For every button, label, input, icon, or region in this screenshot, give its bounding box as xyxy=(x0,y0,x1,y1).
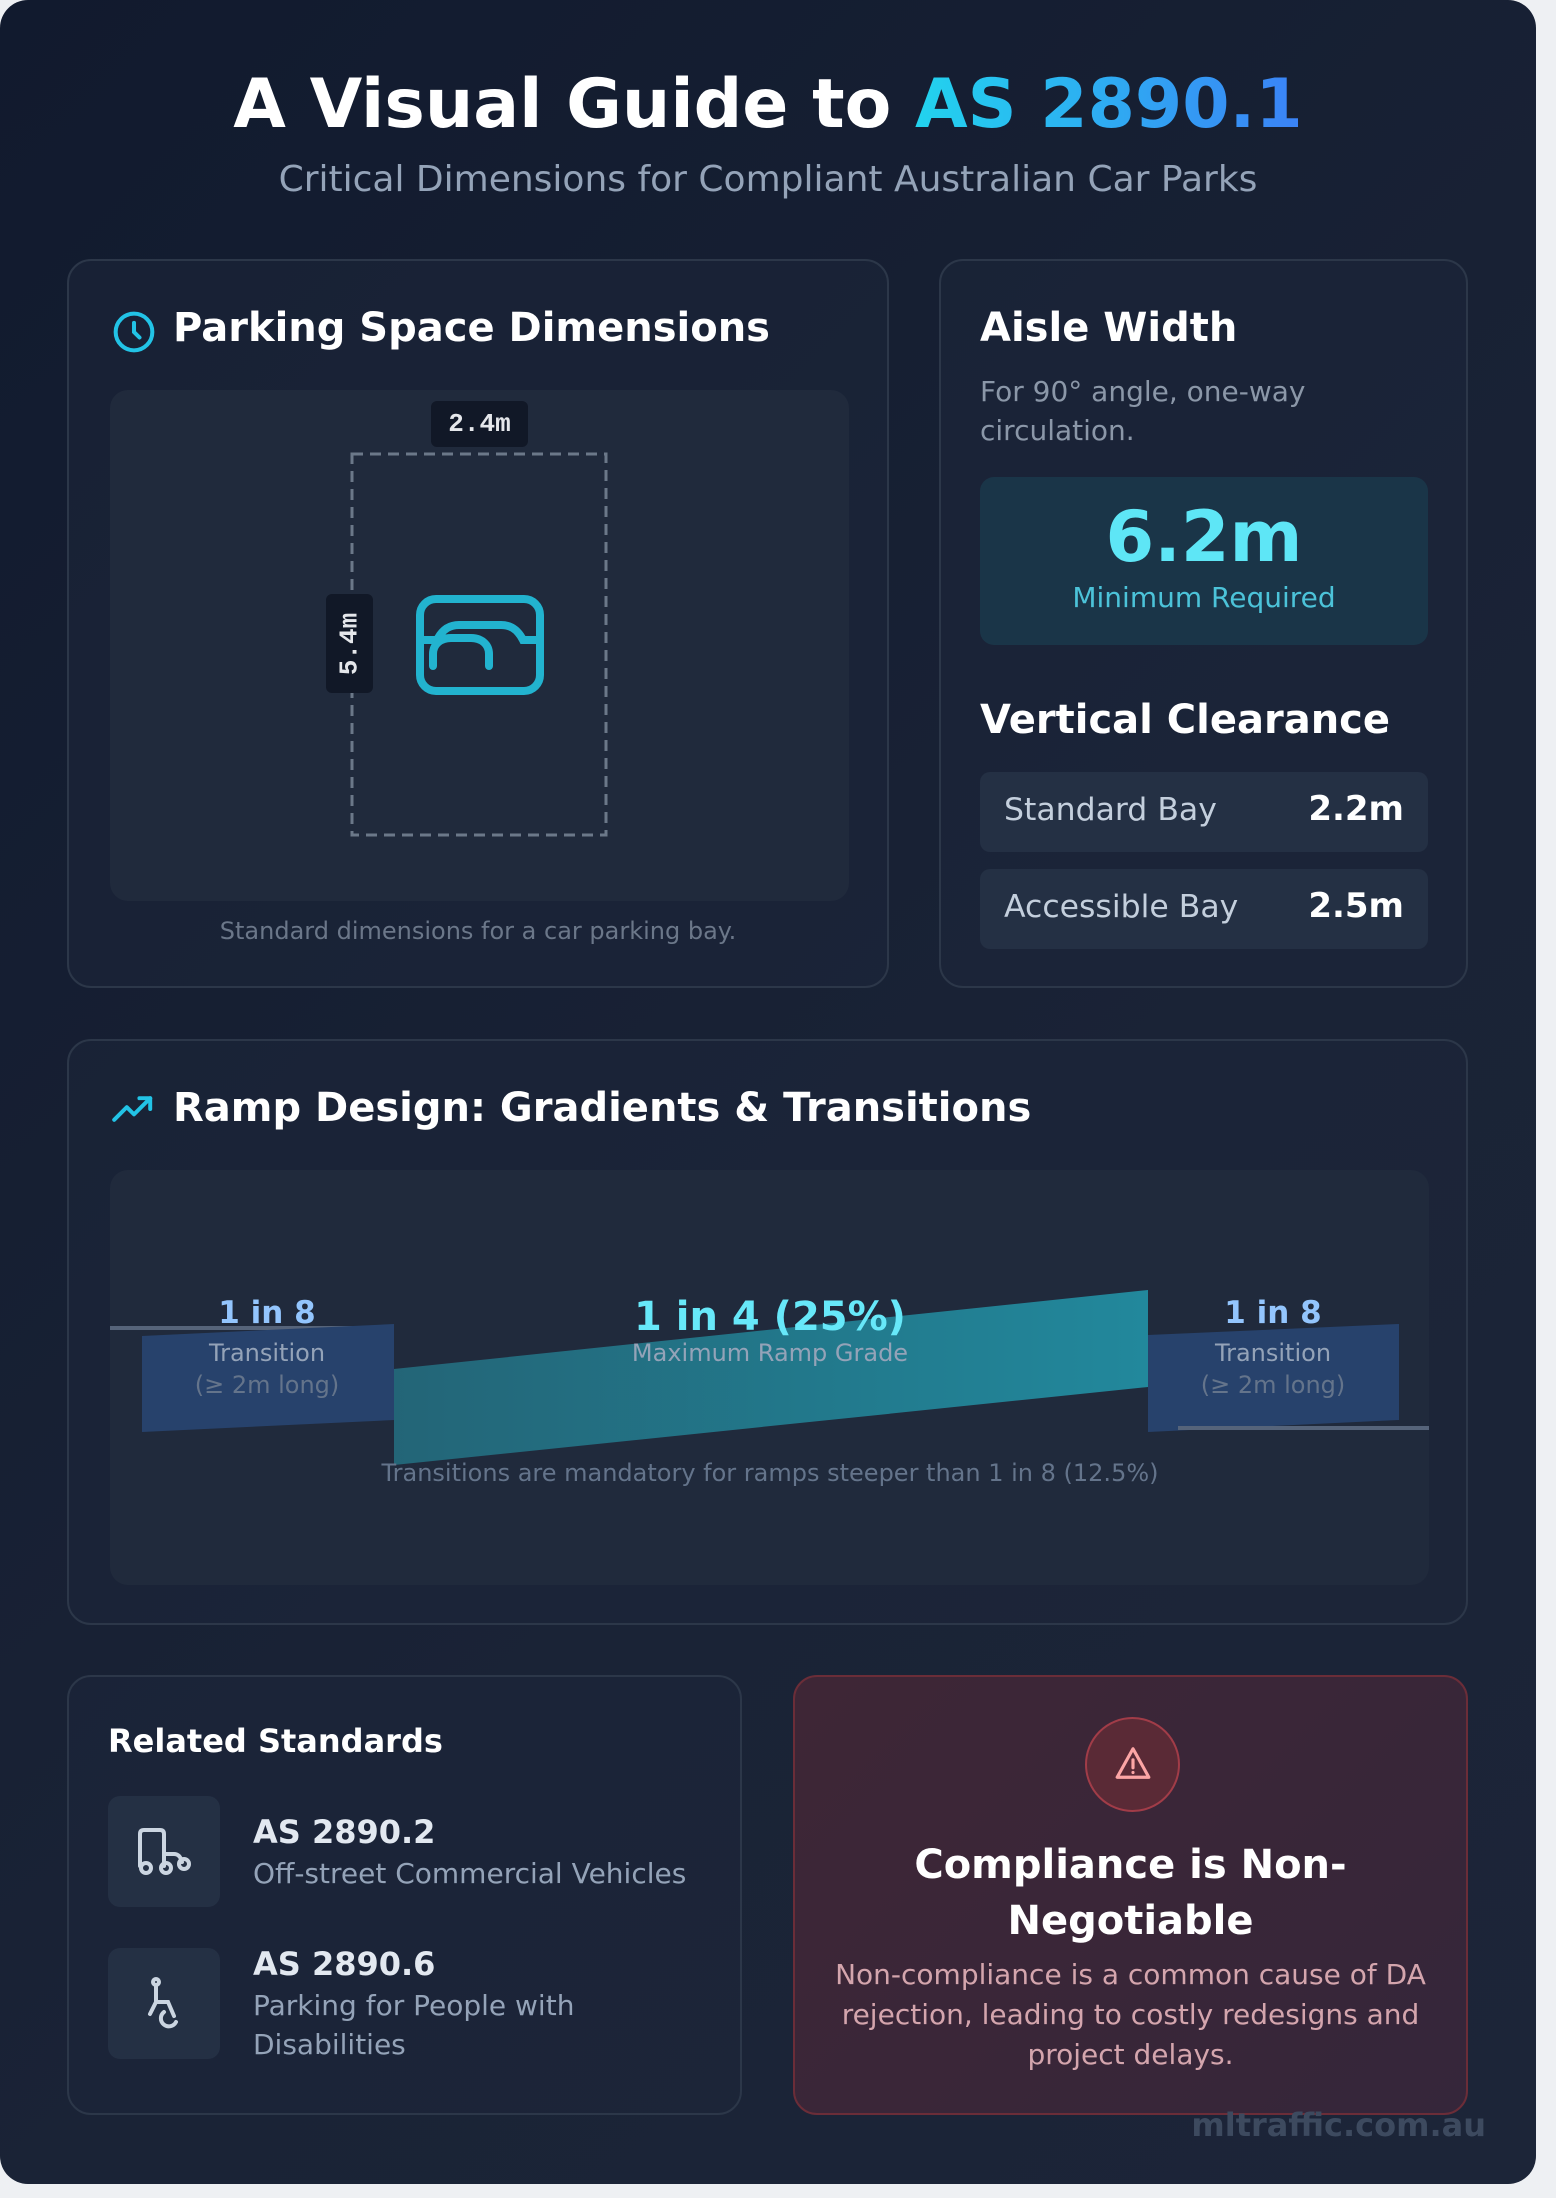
label: 2.4m: 2.4m xyxy=(448,409,511,439)
row: accessible bay: 2.5m xyxy=(1308,886,1404,926)
title: A Visual Guide to AS 2890.1 xyxy=(233,65,1303,144)
dashed bay outline xyxy=(350,452,608,836)
icon: wheelchair xyxy=(108,1948,220,2059)
ramp diagram: (≥ 2m long) xyxy=(1201,1371,1345,1399)
row: accessible bay: Accessible Bay xyxy=(1004,889,1238,925)
heading: Parking Space Dimensions xyxy=(173,305,770,351)
icon: clock xyxy=(114,312,154,352)
label: 5.4m xyxy=(326,594,373,693)
heading: Negotiable xyxy=(1007,1898,1254,1944)
heading: aisle width: Aisle Width xyxy=(980,305,1237,351)
diagram box xyxy=(110,390,849,901)
item: AS 2890.2 xyxy=(108,1796,686,1907)
heading: Related Standards xyxy=(108,1722,443,1760)
icon: truck xyxy=(108,1796,220,1907)
item: AS 2890.2: Off-street Commercial Vehicles xyxy=(253,1857,686,1890)
item: AS 2890.6 xyxy=(108,1945,574,2061)
row: standard bay: 2.2m xyxy=(1308,789,1404,829)
ramp diagram: Transition xyxy=(208,1339,325,1367)
ramp diagram: Maximum Ramp Grade xyxy=(632,1339,908,1367)
ramp diagram xyxy=(110,1290,1429,1487)
row: accessible bay xyxy=(980,869,1428,949)
icon: trending up xyxy=(112,1096,152,1122)
panel: aisle width & vertical clearance xyxy=(939,259,1468,988)
label: 5.4m: 5.4m xyxy=(334,613,364,675)
ramp diagram: (≥ 2m long) xyxy=(195,1371,339,1399)
heading: Ramp Design: Gradients & Transitions xyxy=(173,1085,1031,1131)
item: AS 2890.2: AS 2890.2 xyxy=(253,1813,435,1851)
aisle value box xyxy=(980,477,1428,645)
row: standard bay: Standard Bay xyxy=(1004,792,1217,828)
item: AS 2890.6: AS 2890.6 xyxy=(253,1945,435,1983)
ramp diagram: Transition xyxy=(1214,1339,1331,1367)
subtitle: Critical Dimensions for Compliant Australian Car Parks xyxy=(279,159,1257,200)
heading: Compliance is Non- xyxy=(914,1842,1347,1888)
aisle description: For 90° angle, one-way circulation. xyxy=(980,375,1306,447)
aisle value box: 6.2m xyxy=(1106,496,1302,578)
panel: related standards xyxy=(67,1675,742,2115)
aisle value box: Minimum Required xyxy=(1072,581,1336,614)
ramp diagram: 1 in 8 xyxy=(1224,1295,1322,1331)
caption: Standard dimensions for a car parking bay. xyxy=(220,917,736,945)
icon: car xyxy=(416,595,544,695)
ramp diagram: 1 in 4 (25%) xyxy=(634,1294,906,1340)
heading: vertical clearance: Vertical Clearance xyxy=(980,697,1390,743)
heading xyxy=(914,1842,1347,1944)
label: 2.4m xyxy=(431,401,528,447)
panel: compliance warning xyxy=(793,1675,1468,2115)
panel: parking space dimensions xyxy=(67,259,889,988)
description: Non-compliance is a common cause of DA rejection, leading to costly redesigns and project delays. xyxy=(835,1958,1426,2071)
ramp diagram: 1 in 8 xyxy=(218,1295,316,1331)
item: AS 2890.6: Parking for People with Disabilities xyxy=(253,1989,574,2061)
row: standard bay xyxy=(980,772,1428,852)
watermark: mltraffic.com.au xyxy=(1191,2106,1486,2144)
icon: warning xyxy=(1085,1717,1180,1812)
ramp diagram: Transitions are mandatory for ramps steeper than 1 in 8 (12.5%) xyxy=(380,1459,1158,1487)
panel: ramp design xyxy=(67,1039,1468,1625)
